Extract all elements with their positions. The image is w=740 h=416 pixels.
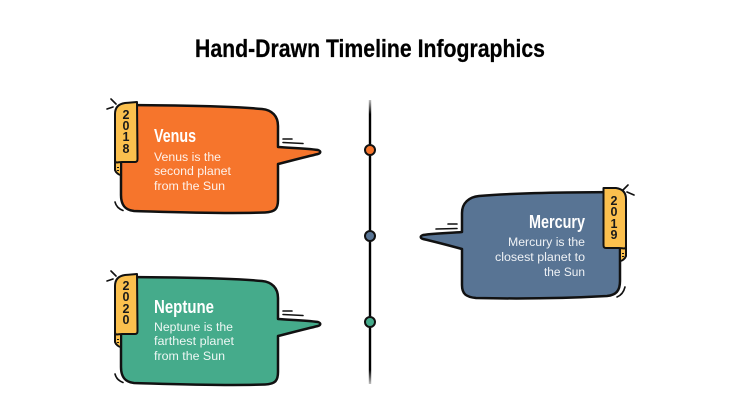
description: the Sun	[544, 265, 585, 279]
year: 2	[123, 279, 130, 293]
timeline dot: Venus	[365, 145, 375, 155]
year: 0	[123, 290, 130, 304]
description	[495, 235, 585, 279]
description: Venus is the	[154, 150, 221, 164]
speech bubble	[121, 277, 320, 385]
title: Hand-Drawn Timeline Infographics	[195, 35, 545, 63]
heading: Neptune	[154, 297, 214, 317]
timeline dot: Neptune	[365, 317, 375, 327]
year: 2	[123, 302, 130, 316]
description: Neptune is the	[154, 320, 233, 334]
year: 1	[123, 130, 130, 144]
ribbon curl	[115, 332, 121, 347]
description: second planet	[154, 164, 232, 178]
description: closest planet to	[495, 250, 585, 264]
heading: Venus	[154, 126, 196, 146]
year: 0	[123, 313, 130, 327]
timeline dot: Mercury	[365, 231, 375, 241]
description	[154, 320, 235, 363]
heading: Mercury	[529, 212, 585, 232]
description	[154, 150, 232, 193]
speech bubble	[421, 192, 620, 298]
motion lines	[107, 99, 303, 210]
year: 9	[611, 228, 618, 242]
ribbon curl	[620, 246, 626, 261]
ribbon curl	[115, 160, 121, 175]
year ribbon	[604, 188, 626, 248]
year ribbon	[115, 274, 138, 334]
motion lines	[436, 185, 634, 297]
year ribbon	[115, 102, 138, 162]
description: from the Sun	[154, 349, 225, 363]
year: 2	[123, 108, 130, 122]
panel: Venus	[107, 99, 320, 213]
timeline	[365, 100, 375, 384]
year	[611, 194, 618, 242]
description: from the Sun	[154, 179, 225, 193]
panel: Neptune	[107, 271, 320, 385]
year: 8	[123, 142, 130, 156]
motion lines	[107, 271, 303, 382]
description: farthest planet	[154, 334, 235, 348]
year	[123, 279, 130, 327]
year: 1	[611, 217, 618, 231]
panel: Mercury	[421, 185, 634, 298]
year	[123, 108, 130, 156]
year: 0	[123, 119, 130, 133]
description: Mercury is the	[508, 235, 585, 249]
year: 0	[611, 205, 618, 219]
year: 2	[611, 194, 618, 208]
speech bubble	[121, 105, 320, 213]
